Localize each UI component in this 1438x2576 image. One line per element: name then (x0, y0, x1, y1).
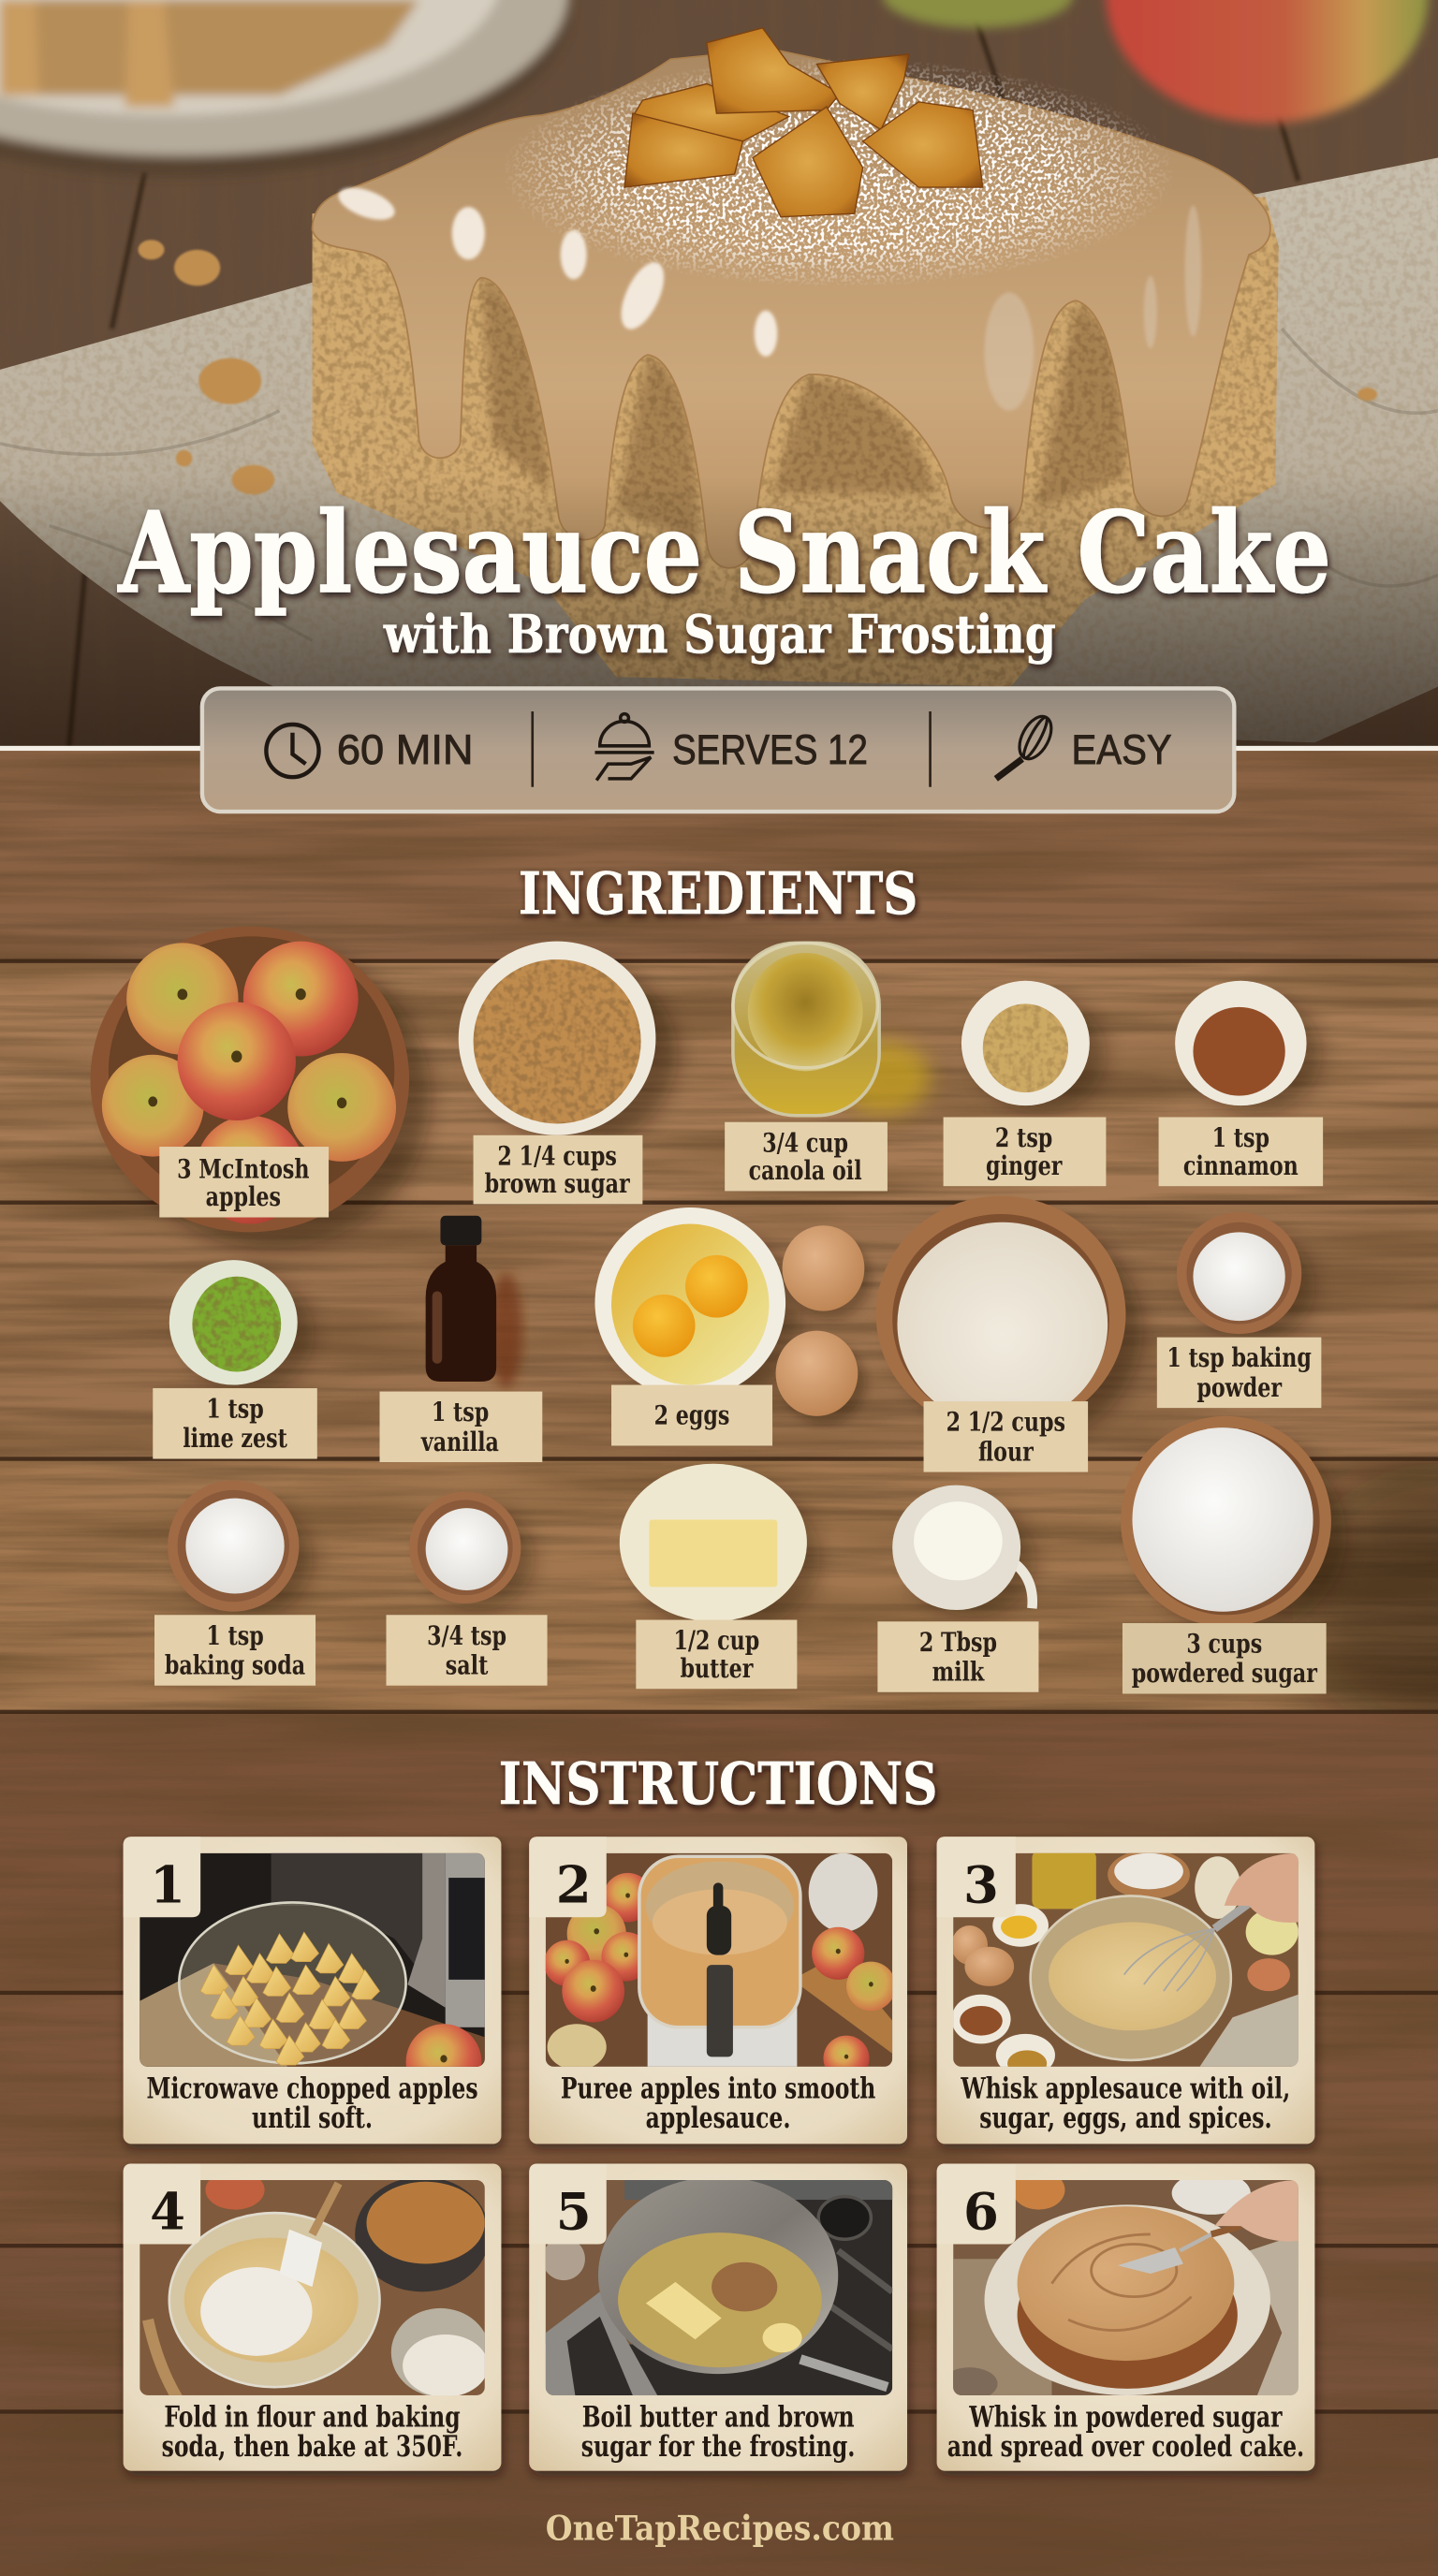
step 5 photo: butter and brown sugar in pan (542, 2177, 896, 2395)
ingredient: milk: 2 Tbsp (919, 1626, 997, 1658)
ingredient: flour: 2 1/2 cups (946, 1406, 1065, 1437)
ingredients heading: INGREDIENTS (519, 860, 917, 928)
step 3 text: sugar, eggs, and spices. (979, 2101, 1272, 2135)
step 6 card: 6 (963, 2182, 999, 2242)
ingredient: butter (620, 1464, 820, 1689)
hero photo: frosted cake on linen (0, 0, 1438, 748)
ingredient: flour: flour (978, 1436, 1034, 1467)
difficulty text: EASY (1072, 726, 1172, 773)
step 3 photo: whisking batter (951, 1850, 1299, 2076)
ingredient: powdered sugar: 3 cups (1186, 1628, 1262, 1659)
powdered sugar (501, 57, 1175, 287)
ingredient: baking soda: baking soda (165, 1649, 305, 1680)
background plate (0, 0, 572, 178)
ingredient: lime zest (153, 1260, 317, 1459)
step 5 card: 5 (556, 2182, 592, 2242)
background apples (883, 0, 1428, 124)
step 3 text: Whisk applesauce with oil, (961, 2071, 1290, 2105)
glazed apple chunks (624, 28, 983, 217)
step 1 text: Microwave chopped apples (147, 2071, 478, 2105)
step 5 text (581, 2400, 855, 2464)
ingredient: lime zest: 1 tsp (206, 1393, 264, 1424)
step 4 text: Fold in flour and baking (164, 2400, 461, 2434)
ingredient: butter: butter (680, 1652, 754, 1684)
step 2 text: applesauce. (646, 2101, 791, 2135)
linen cloth (0, 157, 1438, 742)
frosting highlights (334, 182, 777, 357)
ingredient: eggs: 2 eggs (654, 1399, 729, 1430)
ingredient: canola oil: canola oil (749, 1155, 862, 1186)
ingredient: brown sugar: brown sugar (485, 1168, 630, 1199)
ingredient: flour (876, 1196, 1142, 1472)
step 4 text: soda, then bake at 350F. (162, 2430, 462, 2464)
step 6 number (937, 2163, 1016, 2244)
time icon (266, 724, 319, 777)
ingredient: vanilla: vanilla (420, 1426, 499, 1456)
step 3 text (961, 2071, 1290, 2135)
step 4 text (162, 2400, 462, 2464)
info bar (202, 688, 1234, 812)
ingredient: milk (877, 1486, 1038, 1692)
instructions heading: INSTRUCTIONS (499, 1750, 937, 1818)
ingredient: cinnamon: cinnamon (1183, 1149, 1299, 1181)
ingredient: baking soda: 1 tsp (206, 1619, 264, 1651)
step 4 card: 4 (150, 2182, 185, 2242)
ingredient: salt: 3/4 tsp (427, 1619, 506, 1651)
step 2 text (561, 2071, 875, 2135)
ingredient: apples (91, 927, 431, 1249)
step 1 text: until soft. (252, 2101, 373, 2135)
step 1 card (124, 1837, 501, 2144)
cake body (313, 198, 1279, 687)
step 2 photo: food processor (544, 1853, 896, 2082)
step 1 number (124, 1837, 200, 1917)
ingredient: brown sugar: 2 1/4 cups (497, 1140, 617, 1171)
ingredient: ginger (944, 981, 1106, 1186)
step 4 card (124, 2163, 501, 2471)
ingredient: lime zest: lime zest (183, 1423, 287, 1454)
step 5 text: Boil butter and brown (582, 2400, 855, 2434)
ingredient: powdered sugar: powdered sugar (1132, 1658, 1318, 1689)
ingredient: baking soda (154, 1480, 315, 1686)
serving icon (594, 714, 654, 781)
step 6 text: Whisk in powdered sugar (969, 2400, 1283, 2434)
ingredient: canola oil (725, 943, 931, 1191)
ingredient: canola oil: 3/4 cup (762, 1127, 848, 1158)
step 1 text (147, 2071, 478, 2135)
step 3 card (937, 1837, 1314, 2144)
step 2 number (529, 1837, 607, 1917)
step 5 card (529, 2163, 907, 2471)
ingredient: ginger: 2 tsp (995, 1121, 1052, 1153)
caramel frosting with drips (313, 50, 1270, 568)
footer website: OneTapRecipes.com (546, 2507, 894, 2548)
step 3 card: 3 (963, 1854, 999, 1914)
step 2 text: Puree apples into smooth (561, 2071, 875, 2105)
ingredient: apples: 3 McIntosh (177, 1153, 309, 1184)
separator (532, 711, 534, 787)
ingredient: salt: salt (446, 1649, 489, 1680)
divider line (0, 746, 1438, 751)
ingredient: powdered sugar (1121, 1416, 1346, 1694)
crumbs (138, 240, 1377, 494)
ingredient: milk: milk (932, 1656, 985, 1687)
step 4 number (124, 2163, 200, 2244)
step 3 number (937, 1837, 1016, 1917)
step 6 photo: frosting the cake (942, 2170, 1299, 2400)
wood table background (0, 748, 1438, 2576)
ingredient: cinnamon (1159, 981, 1323, 1186)
whisk icon (996, 711, 1058, 779)
step 6 text (947, 2400, 1304, 2464)
serving text: SERVES 12 (672, 726, 868, 773)
lower hero darkening (0, 476, 1438, 748)
ingredient: vanilla (380, 1216, 542, 1462)
ingredient: cinnamon: 1 tsp (1212, 1121, 1269, 1153)
step 2 card: 2 (556, 1854, 592, 1914)
time text: 60 MIN (337, 726, 474, 773)
step 1 card: 1 (150, 1854, 185, 1914)
subtitle: with Brown Sugar Frosting (383, 604, 1056, 666)
ingredient: brown sugar (459, 942, 677, 1204)
ingredient: salt (387, 1492, 548, 1686)
ingredient: baking powder: powder (1196, 1371, 1283, 1402)
step 4 photo: folding in flour (139, 2170, 490, 2398)
step 5 text: sugar for the frosting. (581, 2430, 855, 2464)
ingredient: vanilla: 1 tsp (432, 1397, 489, 1427)
ingredient: ginger: ginger (986, 1149, 1063, 1181)
ingredient: butter: 1/2 cup (673, 1624, 759, 1656)
separator (930, 711, 932, 787)
ingredient: baking powder (1157, 1212, 1321, 1408)
step 1 photo: apples in microwave (139, 1853, 485, 2100)
ingredient: apples: apples (206, 1181, 281, 1212)
step 6 text: and spread over cooled cake. (947, 2430, 1304, 2464)
ingredient: baking powder: 1 tsp baking (1167, 1342, 1312, 1373)
step 2 card (529, 1837, 907, 2144)
step 5 number (529, 2163, 607, 2244)
ingredient: eggs (594, 1208, 871, 1445)
step 6 card (937, 2163, 1314, 2471)
